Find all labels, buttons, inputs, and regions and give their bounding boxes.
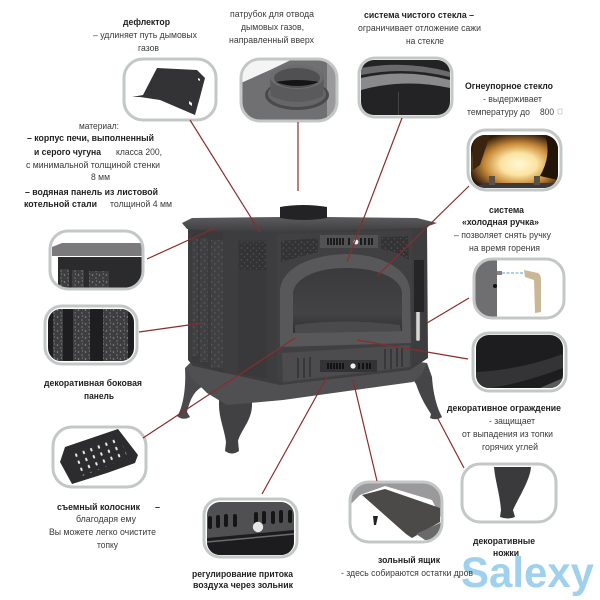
text: decorative side panel: декоративная боковая <box>44 378 142 388</box>
text: decorative legs: декоративные <box>473 536 535 546</box>
text: decorative legs <box>473 536 535 558</box>
stove base plate <box>185 360 427 405</box>
stove corner panel <box>238 240 267 378</box>
text: cold handle <box>454 205 551 253</box>
text: cold handle: «холодная ручка» <box>462 217 539 227</box>
text: removable grate: топку <box>97 540 118 550</box>
ash panel <box>282 345 410 382</box>
text: material: – корпус печи, выполненный <box>27 133 154 143</box>
panel: decorative legs <box>462 464 556 522</box>
deflector part <box>132 68 205 115</box>
panel: deflector <box>124 59 216 120</box>
text: material: и серого чугуна <box>34 147 102 157</box>
text: decorative guard: горячих углей <box>482 442 538 452</box>
text: deflector: дефлектор <box>123 17 170 27</box>
text: deflector: – удлиняет путь дымовых <box>93 30 197 40</box>
stove body <box>188 226 428 385</box>
panel: fire glass <box>468 130 561 190</box>
text: decorative side panel <box>44 378 142 401</box>
text: air regulation: регулирование притока <box>192 569 294 579</box>
text: refractory glass: 800 <box>540 107 554 117</box>
text: removable grate <box>49 502 160 550</box>
text: clean glass system <box>358 10 481 46</box>
text: ash drawer <box>341 555 473 578</box>
text: flue outlet <box>229 9 314 45</box>
text: flue outlet: дымовых газов, <box>241 22 304 32</box>
panel: air regulation <box>204 499 297 557</box>
bottom vent <box>320 360 377 372</box>
side door strip <box>414 260 424 312</box>
text: material: с минимальной толщиной стенки <box>26 160 160 170</box>
text: ash drawer: зольный ящик <box>378 555 440 565</box>
text: clean glass system: на стекле <box>406 36 444 46</box>
text: air regulation <box>192 569 294 590</box>
panel: ash drawer <box>350 482 442 542</box>
icon: missing degree glyph <box>558 109 562 114</box>
text: removable grate: – <box>155 502 160 512</box>
stove rear left leg <box>177 368 205 419</box>
callout lines <box>139 118 469 494</box>
top vent <box>320 235 378 248</box>
text: ash drawer: - здесь собираются остатки дров <box>341 568 473 578</box>
ornament left <box>281 238 318 262</box>
text: flue outlet: направленный вверх <box>229 35 314 45</box>
text: clean glass system: система чистого стекла – <box>364 10 474 20</box>
text: refractory glass: температуру до <box>467 107 530 117</box>
ornament right <box>381 236 409 260</box>
stove front face <box>277 230 412 384</box>
text: cold handle: – позволяет снять ручку <box>454 230 551 240</box>
text: material: класса 200, <box>116 147 162 157</box>
panel: flue outlet <box>241 59 337 121</box>
panel: decorative guard <box>473 333 566 391</box>
panel: clean glass system <box>359 58 452 117</box>
text: decorative guard <box>447 403 561 452</box>
stove front leg <box>219 396 252 454</box>
text: cold handle: на время горения <box>469 243 540 253</box>
text: decorative side panel: панель <box>84 391 114 401</box>
text: removable grate: съемный колосник <box>57 502 140 512</box>
grate holes <box>70 434 128 476</box>
text: removable grate: благодаря ему <box>76 514 136 524</box>
text: flue outlet: патрубок для отвода <box>230 9 314 19</box>
panel: cold handle <box>474 259 564 318</box>
text: decorative guard: декоративное ограждение <box>447 403 561 413</box>
stove corner upper ornament <box>239 242 266 270</box>
text: refractory glass: - выдерживает <box>483 94 542 104</box>
text: deflector <box>93 17 197 53</box>
ash panel ribs <box>298 348 402 378</box>
text: deflector: газов <box>138 43 159 53</box>
text: material: толщиной 4 мм <box>110 199 172 209</box>
text: material: котельной стали <box>24 199 97 209</box>
firebox grate in window <box>295 322 401 333</box>
door <box>280 254 411 347</box>
text: decorative legs: ножки <box>493 548 519 558</box>
panel: decorative side panel <box>45 306 137 364</box>
stove side panel <box>191 230 223 373</box>
stove top plate <box>182 217 437 232</box>
text: material: – водяная панель из листовой <box>25 187 158 197</box>
text: decorative guard: от выпадения из топки <box>462 429 553 439</box>
leg photo <box>494 467 531 518</box>
stove side panel speckle strips <box>192 238 223 368</box>
text: material <box>24 121 172 209</box>
text: refractory glass: Огнеупорное стекло <box>465 81 553 91</box>
door window <box>293 268 402 333</box>
door handle <box>416 311 420 341</box>
panel: top corner detail <box>50 231 143 289</box>
text: cold handle: система <box>489 205 525 215</box>
text: decorative guard: - защищает <box>489 416 535 426</box>
watermark: Salexy: Salexy <box>461 549 594 597</box>
text: material: 8 мм <box>91 172 110 182</box>
deflector bolt holes <box>189 78 200 106</box>
text: material: материал: <box>79 121 119 131</box>
stove rear right leg <box>408 363 442 419</box>
text: refractory glass <box>465 81 554 117</box>
text: removable grate: Вы можете легко очистите <box>49 527 156 537</box>
text: air regulation: воздуха через зольник <box>193 580 293 590</box>
flue <box>280 205 327 220</box>
stove <box>177 205 442 454</box>
panel: removable grate <box>53 427 146 487</box>
text: clean glass system: ограничивает отложение сажи <box>358 23 481 33</box>
